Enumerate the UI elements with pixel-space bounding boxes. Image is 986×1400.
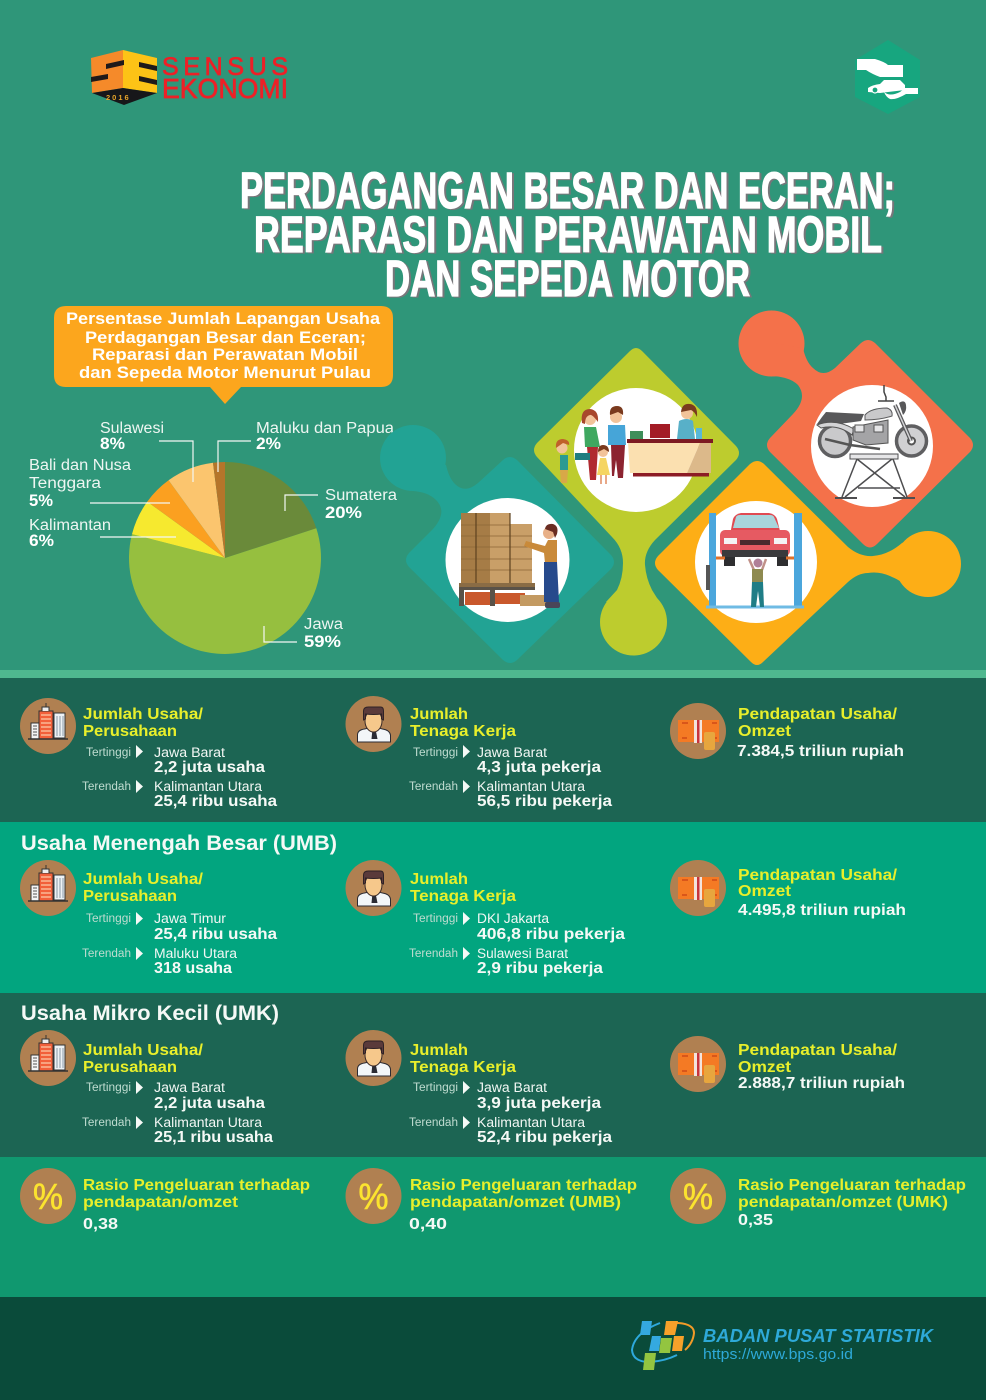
ratio: total — [20, 1168, 310, 1233]
puzzle piece: coral motorcycle — [738, 310, 973, 548]
stat: pendapatan usaha UMK — [670, 1036, 905, 1092]
stat: jumlah usaha UMB: 318 usaha — [154, 960, 232, 977]
stat: jumlah usaha — [20, 698, 277, 810]
pie chart — [29, 420, 397, 654]
background: header area — [0, 0, 986, 670]
stat: jumlah tenaga kerja UMK: Tenaga Kerja — [410, 1059, 516, 1076]
stat: jumlah usaha: Jumlah Usaha/ — [83, 706, 204, 723]
stat: jumlah usaha UMK: Perusahaan — [83, 1059, 177, 1076]
ratio: total: % — [33, 1176, 63, 1217]
ratio: UMK: % — [683, 1176, 713, 1217]
illustration: car on lift with mechanic — [706, 513, 804, 607]
ratio: UMK: 0,35 — [738, 1212, 773, 1229]
stat: jumlah tenaga kerja UMB: Sulawesi Barat — [477, 946, 568, 961]
stat: pendapatan usaha: Omzet — [738, 723, 792, 740]
stat: jumlah tenaga kerja UMK: Jawa Barat — [477, 1080, 547, 1095]
stat: jumlah tenaga kerja UMK: Kalimantan Utara — [477, 1115, 585, 1130]
ratio: UMB — [346, 1168, 637, 1233]
label: Bali dan Nusa Tenggara — [29, 457, 131, 510]
ratio: UMB: 0,40 — [409, 1216, 447, 1233]
stat: jumlah tenaga kerja: 56,5 ribu pekerja — [477, 793, 612, 810]
stat: jumlah tenaga kerja UMB: 406,8 ribu pekerja — [477, 926, 625, 943]
title — [240, 162, 895, 307]
stat: jumlah tenaga kerja UMK: 52,4 ribu pekerja — [477, 1129, 612, 1146]
stat: jumlah usaha UMB: Jumlah Usaha/ — [83, 871, 204, 888]
label: Jawa: Jawa — [304, 616, 343, 633]
stat: pendapatan usaha UMB — [670, 860, 906, 919]
panel: expenditure ratios — [0, 1157, 986, 1297]
stat: pendapatan usaha: Pendapatan Usaha/ — [738, 706, 898, 723]
stat: jumlah tenaga kerja UMB: 2,9 ribu pekerja — [477, 960, 603, 977]
stat: jumlah usaha UMK: 25,1 ribu usaha — [154, 1129, 273, 1146]
stat: pendapatan usaha UMB: 4.495,8 triliun rupiah — [738, 902, 906, 919]
label: Bali dan Nusa Tenggara: Bali dan Nusa — [29, 457, 131, 474]
stat: jumlah tenaga kerja UMK: Terendah — [409, 1117, 458, 1129]
illustration: motorcycle on stand — [817, 385, 926, 498]
stat: jumlah tenaga kerja UMB: DKI Jakarta — [477, 911, 549, 926]
stat: jumlah usaha UMB: Terendah — [82, 948, 131, 960]
callout: chart title — [54, 306, 393, 404]
stat: jumlah tenaga kerja — [346, 696, 612, 810]
label: Sulawesi: 8% — [100, 434, 125, 453]
stat: jumlah usaha: Kalimantan Utara — [154, 779, 262, 794]
label: Sumatera: 20% — [325, 503, 362, 522]
label: Kalimantan: Kalimantan — [29, 517, 111, 534]
callout: chart title: Reparasi dan Perawatan Mobil — [92, 345, 358, 364]
logo: Sensus Ekonomi 2016 — [91, 50, 288, 105]
stat: jumlah tenaga kerja UMK: Tertinggi — [413, 1082, 458, 1094]
stat: jumlah tenaga kerja: Tertinggi — [413, 747, 458, 759]
stat: jumlah usaha: 25,4 ribu usaha — [154, 793, 277, 810]
stat: jumlah usaha UMB: Tertinggi — [86, 913, 131, 925]
label: Jawa — [304, 616, 343, 651]
title: DAN SEPEDA MOTOR — [385, 250, 750, 307]
panel: Usaha Mikro Kecil — [0, 993, 986, 1157]
stat: pendapatan usaha UMK: 2.888,7 triliun rupiah — [738, 1075, 905, 1092]
stat: jumlah usaha UMK — [20, 1030, 273, 1146]
ratio: total: pendapatan/omzet — [83, 1194, 239, 1211]
panel: overall totals — [0, 678, 986, 822]
stat: jumlah tenaga kerja: Kalimantan Utara — [477, 779, 585, 794]
stat: jumlah usaha: 2,2 juta usaha — [154, 759, 265, 776]
label: Sulawesi — [100, 420, 164, 453]
ratio: UMB: pendapatan/omzet (UMB) — [410, 1194, 621, 1211]
puzzle piece: car repair (orange) — [655, 461, 961, 665]
label: Bali dan Nusa Tenggara: 5% — [29, 491, 53, 510]
ratio: UMK: Rasio Pengeluaran terhadap — [738, 1177, 966, 1194]
stat: jumlah usaha UMB — [20, 860, 277, 977]
stat: jumlah tenaga kerja UMK: 3,9 juta pekerja — [477, 1095, 601, 1112]
ratio: UMK: pendapatan/omzet (UMK) — [738, 1194, 948, 1211]
stat: jumlah usaha UMB: Perusahaan — [83, 888, 177, 905]
stat: pendapatan usaha UMK: Omzet — [738, 1059, 792, 1076]
label: Sulawesi: Sulawesi — [100, 420, 164, 437]
puzzle piece: warehouse (teal) — [380, 425, 614, 663]
stat: jumlah tenaga kerja: Tenaga Kerja — [410, 723, 516, 740]
illustration: family at cashier — [556, 404, 713, 484]
stat: jumlah usaha UMK: 2,2 juta usaha — [154, 1095, 265, 1112]
stat: pendapatan usaha: 7.384,5 triliun rupiah — [737, 743, 904, 760]
stat: jumlah tenaga kerja UMK — [346, 1030, 612, 1146]
stat: jumlah tenaga kerja: Jumlah — [410, 706, 468, 723]
ratio: UMB: Rasio Pengeluaran terhadap — [410, 1177, 637, 1194]
stat: jumlah tenaga kerja UMB: Jumlah — [410, 871, 468, 888]
stat: jumlah usaha UMK: Tertinggi — [86, 1082, 131, 1094]
stat: jumlah tenaga kerja UMK: Jumlah — [410, 1042, 468, 1059]
stat: jumlah usaha: Jawa Barat — [154, 745, 225, 760]
stat: jumlah usaha UMK: Terendah — [82, 1117, 131, 1129]
heading: UMK: Usaha Mikro Kecil (UMK) — [21, 1002, 279, 1025]
label: Maluku dan Papua: 2% — [256, 434, 281, 453]
callout: chart title: Persentase Jumlah Lapangan Usaha — [66, 309, 381, 328]
stat: jumlah tenaga kerja UMB — [346, 860, 625, 977]
stat: jumlah usaha UMB: 25,4 ribu usaha — [154, 926, 277, 943]
stat: jumlah usaha: Perusahaan — [83, 723, 177, 740]
logo: Sensus Ekonomi 2016: SENSUS — [162, 53, 288, 81]
label: Kalimantan — [29, 517, 111, 550]
ratio: total: Rasio Pengeluaran terhadap — [83, 1177, 310, 1194]
label: Sumatera: Sumatera — [325, 487, 397, 504]
stat: jumlah usaha UMK: Jumlah Usaha/ — [83, 1042, 204, 1059]
ratio: UMK — [670, 1168, 966, 1229]
stat: pendapatan usaha — [670, 703, 904, 760]
stat: jumlah tenaga kerja UMB: Terendah — [409, 948, 458, 960]
label: Jawa: 59% — [304, 632, 341, 651]
panel: Usaha Menengah Besar — [0, 822, 986, 993]
logo: Badan Pusat Statistik: BADAN PUSAT STATISTIK — [703, 1326, 935, 1346]
logo: Badan Pusat Statistik — [632, 1321, 935, 1370]
puzzle piece: shopping (lime) — [534, 348, 739, 656]
stat: pendapatan usaha UMB: Omzet — [738, 883, 792, 900]
logo: Badan Pusat Statistik: https://www.bps.go.id — [703, 1346, 853, 1363]
label: Kalimantan: 6% — [29, 531, 54, 550]
stat: jumlah tenaga kerja UMB: Tertinggi — [413, 913, 458, 925]
stat: pendapatan usaha UMK: Pendapatan Usaha/ — [738, 1042, 898, 1059]
icon: hexagon with hands and car — [855, 40, 920, 114]
stat: jumlah tenaga kerja: 4,3 juta pekerja — [477, 759, 601, 776]
ratio: UMB: % — [358, 1176, 388, 1217]
stat: jumlah usaha UMK: Kalimantan Utara — [154, 1115, 262, 1130]
stat: jumlah usaha: Tertinggi — [86, 747, 131, 759]
stat: jumlah usaha: Terendah — [82, 781, 131, 793]
label: Maluku dan Papua: Maluku dan Papua — [256, 420, 394, 437]
stat: pendapatan usaha UMB: Pendapatan Usaha/ — [738, 867, 898, 884]
ratio: total: 0,38 — [83, 1216, 118, 1233]
logo: Sensus Ekonomi 2016: 2016 — [106, 93, 131, 102]
label: Bali dan Nusa Tenggara: Tenggara — [29, 475, 101, 492]
stat: jumlah tenaga kerja: Terendah — [409, 781, 458, 793]
illustration: boxes and worker — [459, 513, 560, 608]
stat: jumlah usaha UMB: Jawa Timur — [154, 911, 227, 926]
stat: jumlah usaha UMB: Maluku Utara — [154, 946, 237, 961]
stat: jumlah tenaga kerja UMB: Tenaga Kerja — [410, 888, 516, 905]
label: Sumatera — [325, 487, 397, 522]
heading: UMB: Usaha Menengah Besar (UMB) — [21, 832, 337, 855]
callout: chart title: Perdagangan Besar dan Eceran; — [85, 328, 366, 347]
callout: chart title: dan Sepeda Motor Menurut Pulau — [79, 363, 371, 382]
stat: jumlah tenaga kerja: Jawa Barat — [477, 745, 547, 760]
stat: jumlah usaha UMK: Jawa Barat — [154, 1080, 225, 1095]
label: Maluku dan Papua — [256, 420, 394, 453]
logo: Sensus Ekonomi 2016: EKONOMI — [162, 73, 288, 104]
light separator band — [0, 670, 986, 678]
panel: footer — [0, 1297, 986, 1400]
